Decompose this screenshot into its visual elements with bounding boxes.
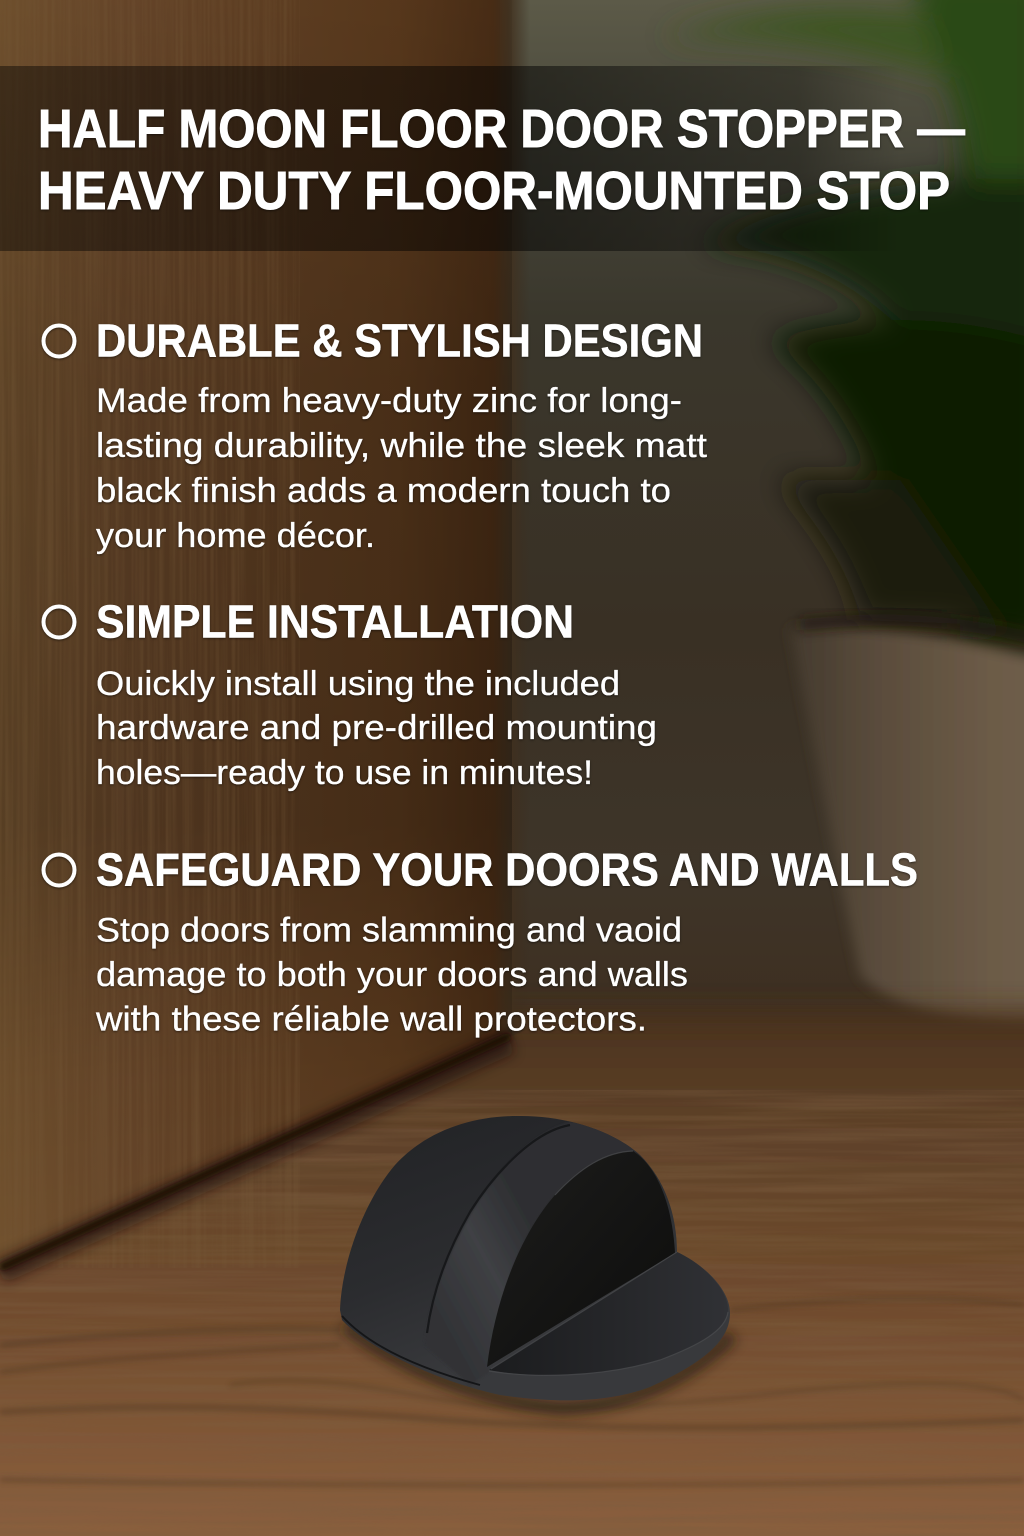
text block: [95, 912, 688, 1038]
text block: Made from heavy-duty zinc for long-: [96, 382, 682, 420]
background: wooden door: [0, 0, 530, 1272]
stopper base plate: [489, 1252, 728, 1375]
icon: ring bullet: [44, 606, 74, 638]
stopper rim line: [342, 1316, 480, 1385]
feature: simple installation: [44, 596, 657, 792]
text block: black finish adds a modern touch to: [96, 472, 671, 510]
stopper shadow: [345, 1325, 732, 1408]
text block: hardware and pre-drilled mounting: [96, 709, 657, 747]
text block: lasting durability, while the sleek matt: [96, 427, 708, 465]
heading: SIMPLE INSTALLATION: [96, 596, 574, 648]
stopper dome: [340, 1116, 730, 1400]
heading: DURABLE & STYLISH DESIGN: [96, 314, 703, 366]
background: wooden floor: [0, 1012, 1024, 1536]
stopper centre band: [439, 1123, 634, 1382]
stopper highlights: [489, 1151, 728, 1375]
text block: your home décor.: [96, 517, 375, 555]
feature: durable and stylish design: [44, 314, 708, 555]
panel: title band: [0, 66, 1024, 251]
title: HEAVY DUTY FLOOR-MOUNTED STOP: [38, 161, 950, 221]
text block: holes—ready to use in minutes!: [96, 754, 593, 792]
text block: Stop doors from slamming and vaoid: [96, 912, 682, 950]
stopper front face: [487, 1151, 675, 1367]
text block: damage to both your doors and walls: [96, 956, 688, 994]
icon: ring bullet: [44, 854, 74, 886]
text block: [96, 665, 657, 792]
feature: safeguard your doors and walls: [44, 844, 918, 1038]
icon: ring bullet: [44, 326, 74, 356]
text block: [96, 382, 708, 555]
background: blurred wall: [500, 0, 1024, 1060]
icon: blurred potted plant: [660, 0, 1024, 1025]
text block: Ouickly install using the included: [96, 665, 620, 703]
heading: SAFEGUARD YOUR DOORS AND WALLS: [96, 844, 918, 896]
text block: with these réliable wall protectors.: [95, 1000, 647, 1038]
stopper groove: [427, 1125, 570, 1333]
icon: half moon door stopper: [340, 1116, 732, 1408]
title: [38, 99, 965, 221]
